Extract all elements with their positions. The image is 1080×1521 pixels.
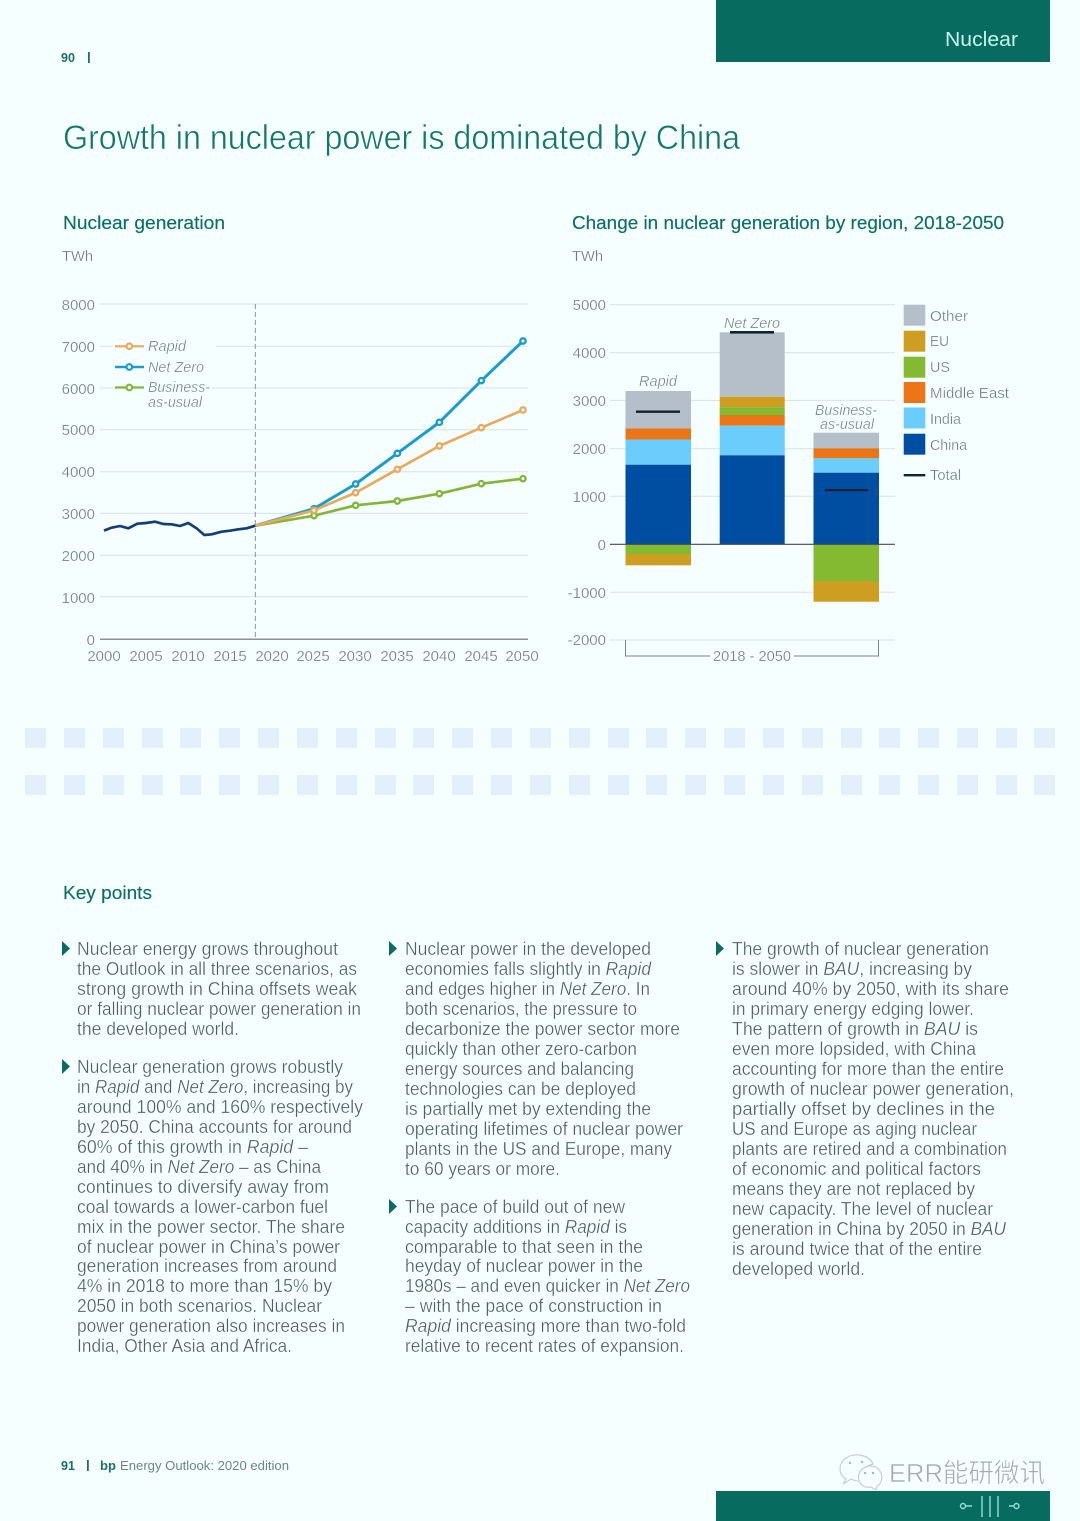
y axis labels: 4000	[62, 464, 95, 481]
bullet paragraph 2: 2050 in both scenarios. Nuclear	[77, 1296, 322, 1316]
bullet paragraph 5: US and Europe as aging nuclear	[732, 1119, 977, 1139]
icon: navigation marks	[960, 1496, 1019, 1517]
x axis labels: 2035	[380, 648, 414, 665]
bullet paragraph 3: quickly than other zero-carbon	[405, 1039, 637, 1059]
bullet paragraph 2: coal towards a lower-carbon fuel	[77, 1197, 328, 1217]
panel: nuclear generation line chart	[62, 212, 539, 665]
bullet paragraph 5: growth of nuclear power generation,	[732, 1079, 1014, 1099]
y axis labels: 2000	[573, 441, 606, 458]
page number top	[61, 51, 90, 65]
panel: change by region stacked bar chart	[568, 212, 1010, 665]
bullet paragraph 3: plants in the US and Europe, many	[405, 1139, 672, 1159]
y axis labels	[568, 297, 606, 649]
bar labels: Net Zero	[724, 315, 780, 332]
legend: scenarios: Rapid	[148, 338, 187, 355]
y axis labels: -2000	[568, 632, 606, 649]
bullet paragraph 5: is around twice that of the entire	[732, 1239, 982, 1259]
x axis labels: 2025	[296, 648, 330, 665]
bullet paragraph 5: developed world.	[732, 1259, 865, 1279]
line: historical	[104, 522, 255, 535]
bullet paragraph 3: and edges higher in Net Zero. In	[405, 979, 650, 999]
bullet paragraph 5: in primary energy edging lower.	[732, 999, 974, 1019]
legend: regions: India	[930, 411, 962, 428]
legend: scenarios: Net Zero	[148, 359, 204, 376]
decorative square pattern	[25, 728, 1055, 795]
legend: scenarios: as-usual	[148, 394, 203, 411]
x axis labels: 2020	[255, 648, 289, 665]
bullet paragraph 2: mix in the power sector. The share	[77, 1217, 345, 1237]
legend: scenarios: Business-	[148, 379, 210, 396]
watermark: ERR	[840, 1455, 1045, 1490]
bar labels: as-usual	[820, 416, 875, 433]
heading: change by region: Change in nuclear generation by region, 2018-2050	[572, 212, 1004, 233]
bullet paragraph 5: The pattern of growth in BAU is	[732, 1019, 978, 1039]
y axis labels: 4000	[573, 345, 606, 362]
line: rapid	[255, 407, 526, 526]
bullet paragraph 2: and 40% in Net Zero – as China	[77, 1157, 322, 1177]
legend: regions: US	[930, 359, 950, 376]
bullet paragraph 3: economies falls slightly in Rapid	[405, 959, 652, 979]
bullet paragraph 2: generation increases from around	[77, 1256, 337, 1276]
bullet paragraph 5: of economic and political factors	[732, 1159, 981, 1179]
bar labels: Business-	[815, 402, 877, 419]
line: net zero	[255, 338, 526, 526]
bullet paragraph 2: power generation also increases in	[77, 1316, 345, 1336]
bullet paragraph 5: accounting for more than the entire	[732, 1059, 1004, 1079]
bullet paragraph 2: India, Other Asia and Africa.	[77, 1336, 292, 1356]
legend: regions: Middle East	[930, 385, 1010, 402]
y axis labels: 6000	[62, 381, 95, 398]
y axis labels: 5000	[62, 422, 95, 439]
bullet paragraph 4: Rapid increasing more than two-fold	[405, 1316, 686, 1336]
bullet paragraph 5: is slower in BAU, increasing by	[732, 959, 972, 979]
bullet paragraph 5: The growth of nuclear generation	[732, 939, 989, 959]
bullet paragraph 2: continues to diversify away from	[77, 1177, 329, 1197]
bullet paragraph 2: 60% of this growth in Rapid –	[77, 1137, 308, 1157]
bullet paragraph 3: Nuclear power in the developed	[405, 939, 651, 959]
bar labels	[639, 315, 877, 433]
bullet paragraph 3: decarbonize the power sector more	[405, 1019, 680, 1039]
bullet paragraph 3: to 60 years or more.	[405, 1159, 560, 1179]
icon: chat bubbles	[840, 1455, 882, 1490]
bullet paragraph 4: comparable to that seen in the	[405, 1237, 643, 1257]
column 3	[716, 939, 1014, 1279]
bullet paragraph 5: new capacity. The level of nuclear	[732, 1199, 993, 1219]
x axis labels: 2050	[505, 648, 539, 665]
bullet paragraph 2: of nuclear power in China’s power	[77, 1237, 340, 1257]
bullet paragraph 4: 1980s – and even quicker in Net Zero	[405, 1276, 690, 1296]
heading: nuclear generation: Nuclear generation	[63, 212, 225, 233]
bullet paragraph 5: partially offset by declines in the	[732, 1099, 995, 1119]
bullet paragraph 3: energy sources and balancing	[405, 1059, 634, 1079]
y axis labels: 3000	[62, 506, 95, 523]
y axis labels: 5000	[573, 297, 606, 314]
y axis labels: 2000	[62, 548, 95, 565]
bullet paragraph 2: around 100% and 160% respectively	[77, 1097, 363, 1117]
bullet paragraph 4	[389, 1197, 690, 1356]
x axis labels: 2045	[464, 648, 498, 665]
column 2	[389, 939, 690, 1356]
bullet paragraph 3: operating lifetimes of nuclear power	[405, 1119, 683, 1139]
bullet paragraph 2	[62, 1057, 363, 1356]
y axis labels: 3000	[573, 393, 606, 410]
unit label: TWh	[572, 248, 603, 265]
bar: Rapid	[626, 391, 691, 565]
bracket: 2018 - 2050	[626, 640, 878, 665]
header tab: Nuclear: Nuclear	[945, 29, 1018, 51]
y axis labels	[62, 297, 95, 649]
footer text: Energy Outlook: 2020 edition	[120, 1459, 289, 1473]
bullet paragraph 5	[716, 939, 1014, 1279]
x axis labels: 2005	[129, 648, 163, 665]
bullet paragraph 5: around 40% by 2050, with its share	[732, 979, 1009, 999]
x axis labels: 2010	[171, 648, 205, 665]
bullet paragraph 2: in Rapid and Net Zero, increasing by	[77, 1077, 353, 1097]
legend: regions: Total	[930, 467, 961, 484]
x axis labels: 2040	[422, 648, 456, 665]
y axis labels: 7000	[62, 339, 95, 356]
y axis labels: 0	[598, 537, 606, 554]
bullet paragraph 2: Nuclear generation grows robustly	[77, 1057, 343, 1077]
bullet paragraph 1	[62, 939, 361, 1039]
page number top: 90	[61, 51, 75, 65]
line: business-as-usual	[255, 476, 526, 526]
bullet paragraph 4: capacity additions in Rapid is	[405, 1217, 627, 1237]
bullet paragraph 1: strong growth in China offsets weak	[77, 979, 358, 999]
bullet paragraph 2: by 2050. China accounts for around	[77, 1117, 352, 1137]
footer text: bp	[100, 1458, 116, 1473]
bullet paragraph 1: Nuclear energy grows throughout	[77, 939, 338, 959]
bracket: 2018 - 2050: 2018 - 2050	[713, 648, 791, 665]
x axis labels: 2000	[87, 648, 121, 665]
bullet paragraph 5: means they are not replaced by	[732, 1179, 975, 1199]
footer text	[61, 1458, 289, 1473]
y axis labels: 1000	[573, 489, 606, 506]
legend: regions: Other	[930, 308, 968, 325]
bullet paragraph 5: generation in China by 2050 in BAU	[732, 1219, 1007, 1239]
bullet paragraph 1: the developed world.	[77, 1019, 239, 1039]
bullet paragraph 1: the Outlook in all three scenarios, as	[77, 959, 357, 979]
x axis labels	[87, 648, 539, 665]
x axis labels: 2030	[338, 648, 372, 665]
header tab: Nuclear	[716, 0, 1050, 62]
bullet paragraph 2: 4% in 2018 to more than 15% by	[77, 1276, 332, 1296]
legend: scenarios	[115, 338, 210, 411]
bullet paragraph 5: plants are retired and a combination	[732, 1139, 1007, 1159]
x axis labels: 2015	[213, 648, 247, 665]
legend: regions	[904, 305, 1010, 484]
bullet paragraph 4: relative to recent rates of expansion.	[405, 1336, 684, 1356]
bullet paragraph 5: even more lopsided, with China	[732, 1039, 977, 1059]
bullet paragraph 4: heyday of nuclear power in the	[405, 1256, 643, 1276]
bullet paragraph 3	[389, 939, 683, 1179]
title: Growth in nuclear power is dominated by China	[63, 119, 740, 157]
unit label: TWh	[62, 248, 93, 265]
legend: regions: China	[930, 437, 968, 454]
bullet paragraph 4: The pace of build out of new	[405, 1197, 626, 1217]
y axis labels: 0	[87, 632, 95, 649]
column 1	[62, 939, 363, 1356]
bullet paragraph 3: both scenarios, the pressure to	[405, 999, 637, 1019]
bullet paragraph 1: or falling nuclear power generation in	[77, 999, 361, 1019]
bullet paragraph 4: – with the pace of construction in	[405, 1296, 662, 1316]
y axis labels: 8000	[62, 297, 95, 314]
bar: Business-as-usual	[814, 433, 879, 602]
footer tab	[716, 1491, 1050, 1521]
watermark: ERR: ERR能研微讯	[889, 1458, 1045, 1488]
y axis labels: 1000	[62, 590, 95, 607]
bar labels: Rapid	[639, 373, 678, 390]
legend: regions: EU	[930, 333, 949, 350]
bullet paragraph 3: technologies can be deployed	[405, 1079, 636, 1099]
heading: key points: Key points	[63, 882, 152, 903]
y axis labels: -1000	[568, 585, 606, 602]
bullet paragraph 3: is partially met by extending the	[405, 1099, 651, 1119]
bar: Net Zero	[720, 331, 785, 544]
footer text: 91	[61, 1459, 75, 1473]
